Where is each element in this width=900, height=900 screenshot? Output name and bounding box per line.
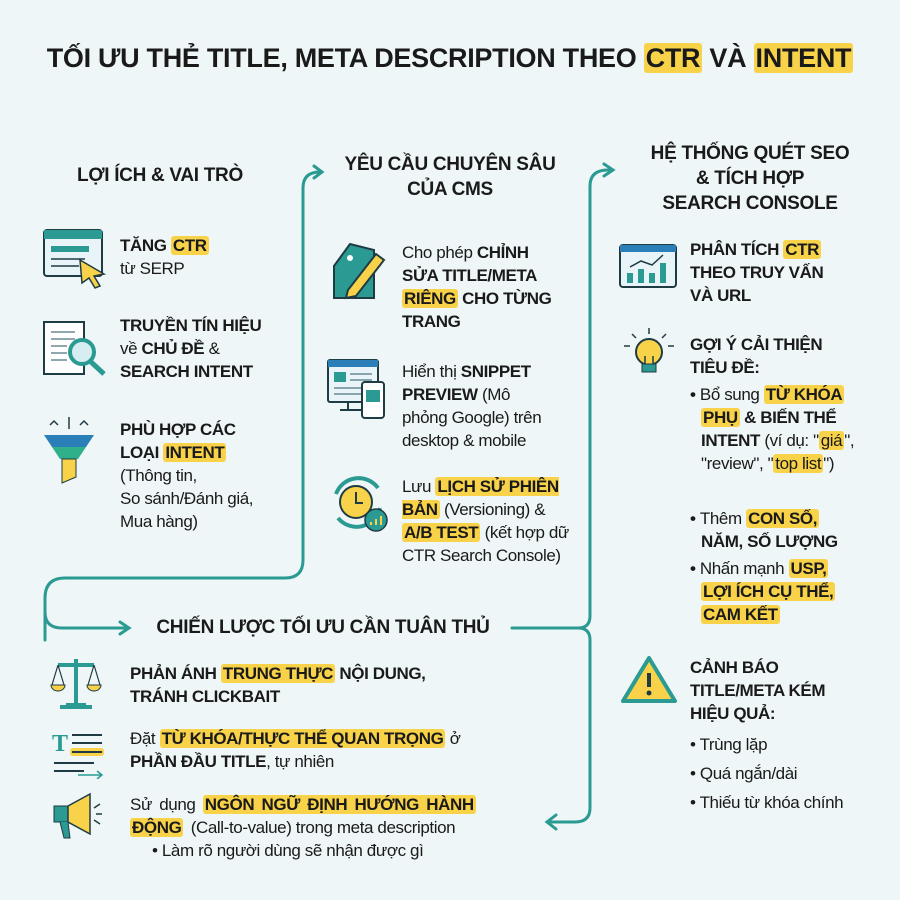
icon: lightbulb: [624, 328, 674, 372]
heading: cms: [344, 152, 556, 200]
text: chinh sua: [402, 243, 551, 331]
text: tu khoa dau title: [130, 729, 461, 771]
text: lich su phien ban: A/B TEST (kết hợp dữ: [404, 523, 569, 542]
text: tang ctr: [120, 236, 209, 278]
icon: text lines: [52, 731, 104, 779]
heading: cms: CỦA CMS: [407, 179, 493, 200]
icon: tag pencil: [333, 242, 386, 300]
text: truyen tin hieu: TRUYỀN TÍN HIỆU: [120, 316, 261, 335]
list: goi y bullets: • Bổ sung TỪ KHÓA: [690, 385, 842, 404]
text: canh bao: • Quá ngắn/dài: [690, 764, 797, 783]
text: phan tich ctr: PHÂN TÍCH CTR: [690, 240, 819, 259]
text: truyen tin hieu: SEARCH INTENT: [120, 362, 253, 381]
text: ngon ngu hanh dong: ĐỘNG (Call-to-value) trong meta description: [132, 818, 455, 837]
icon: text lines: T: [52, 731, 68, 757]
text: truyen tin hieu: về CHỦ ĐỀ &: [120, 339, 220, 358]
text: phu hop intent: [120, 420, 253, 531]
icon: desktop mobile: [327, 359, 385, 419]
icon: scales: [50, 659, 102, 709]
text: tang ctr: từ SERP: [120, 259, 184, 278]
text: tu khoa dau title: PHẦN ĐẦU TITLE, tự nhiên: [130, 752, 334, 771]
list: goi y bullets: INTENT (ví dụ: "giá",: [701, 431, 854, 450]
text: phu hop intent: PHÙ HỢP CÁC: [120, 420, 236, 439]
list: goi y bullets: [690, 385, 854, 624]
heading: he thong quet: SEARCH CONSOLE: [662, 193, 838, 214]
text: ngon ngu hanh dong: Sử dụng NGÔN NGỮ ĐỊNH HƯỚNG HÀNH: [130, 795, 474, 814]
text: tu khoa dau title: Đặt TỪ KHÓA/THỰC THỂ QUAN TRỌNG ở: [130, 729, 461, 748]
text: canh bao: • Trùng lặp: [690, 735, 767, 754]
icon: warning: [621, 656, 678, 703]
text: trung thuc: TRÁNH CLICKBAIT: [130, 687, 280, 706]
text: phu hop intent: Mua hàng): [120, 512, 198, 531]
text: snippet preview: [402, 362, 541, 450]
text: canh bao: • Thiếu từ khóa chính: [690, 793, 843, 812]
icon: megaphone: [54, 792, 102, 838]
text: lich su phien ban: BẢN (Versioning) &: [402, 500, 545, 519]
text: lich su phien ban: CTR Search Console): [402, 546, 561, 565]
text: canh bao: TITLE/META KÉM: [690, 681, 825, 700]
text: snippet preview: Hiển thị SNIPPET: [402, 362, 531, 381]
heading: he thong quet: [651, 142, 849, 214]
text: snippet preview: PREVIEW (Mô: [402, 385, 510, 404]
text: chinh sua: RIÊNG CHO TỪNG: [404, 289, 551, 308]
icon: chart dashboard: [619, 244, 677, 288]
text: trung thuc: [130, 664, 426, 706]
text: chinh sua: Cho phép CHỈNH: [402, 243, 529, 262]
heading: he thong quet: & TÍCH HỢP: [696, 168, 804, 189]
text: phan tich ctr: [690, 240, 823, 305]
list: goi y bullets: PHỤ & BIẾN THỂ: [703, 408, 836, 427]
text: canh bao: HIỆU QUẢ:: [690, 704, 775, 723]
text: phan tich ctr: THEO TRUY VẤN: [690, 263, 823, 282]
list: goi y bullets: NĂM, SỐ LƯỢNG: [701, 532, 838, 551]
text: snippet preview: phỏng Google) trên: [402, 408, 541, 427]
icon: document search: [43, 321, 106, 376]
text: phu hop intent: So sánh/Đánh giá,: [120, 489, 253, 508]
text: goi y cai thien: [690, 335, 822, 377]
text: chinh sua: SỬA TITLE/META: [402, 266, 537, 285]
heading: he thong quet: HỆ THỐNG QUÉT SEO: [651, 143, 849, 164]
text: truyen tin hieu: [120, 316, 261, 381]
text: snippet preview: desktop & mobile: [402, 431, 526, 450]
text: tang ctr: TĂNG CTR: [120, 236, 207, 255]
text: ngon ngu hanh dong: • Làm rõ người dùng sẽ nhận được gì: [152, 841, 423, 860]
text: ngon ngu hanh dong: [130, 794, 476, 860]
text: phu hop intent: (Thông tin,: [120, 466, 197, 485]
list: goi y bullets: • Thêm CON SỐ,: [690, 509, 817, 528]
heading: loi ich: LỢI ÍCH & VAI TRÒ: [77, 165, 243, 186]
text: chinh sua: TRANG: [402, 312, 460, 331]
text: lich su phien ban: [402, 477, 569, 565]
list: goi y bullets: • Nhấn mạnh USP,: [690, 559, 826, 578]
text: trung thuc: PHẢN ÁNH TRUNG THỰC NỘI DUNG,: [130, 664, 426, 683]
heading: cms: YÊU CẦU CHUYÊN SÂU: [344, 154, 556, 175]
title: TỐI ƯU THẺ TITLE, META DESCRIPTION THEO CTR VÀ INTENT: [47, 43, 851, 73]
icon: clock versioning: [334, 476, 388, 532]
text: lich su phien ban: Lưu LỊCH SỬ PHIÊN: [402, 477, 559, 496]
text: goi y cai thien: GỢI Ý CẢI THIỆN: [690, 335, 822, 354]
heading: chien luoc: CHIẾN LƯỢC TỐI ƯU CẦN TUÂN THỦ: [156, 617, 490, 638]
icon: funnel: [44, 417, 94, 484]
text: canh bao: CẢNH BÁO: [690, 658, 778, 677]
list: goi y bullets: CAM KẾT: [703, 605, 778, 624]
icon: browser cursor: [43, 229, 106, 289]
text: phan tich ctr: VÀ URL: [690, 286, 751, 305]
text: goi y cai thien: TIÊU ĐỀ:: [690, 358, 760, 377]
text: canh bao: [690, 658, 843, 812]
list: goi y bullets: LỢI ÍCH CỤ THỂ,: [703, 582, 833, 601]
list: goi y bullets: "review", "top list"): [701, 454, 834, 473]
text: phu hop intent: LOẠI INTENT: [120, 443, 224, 462]
